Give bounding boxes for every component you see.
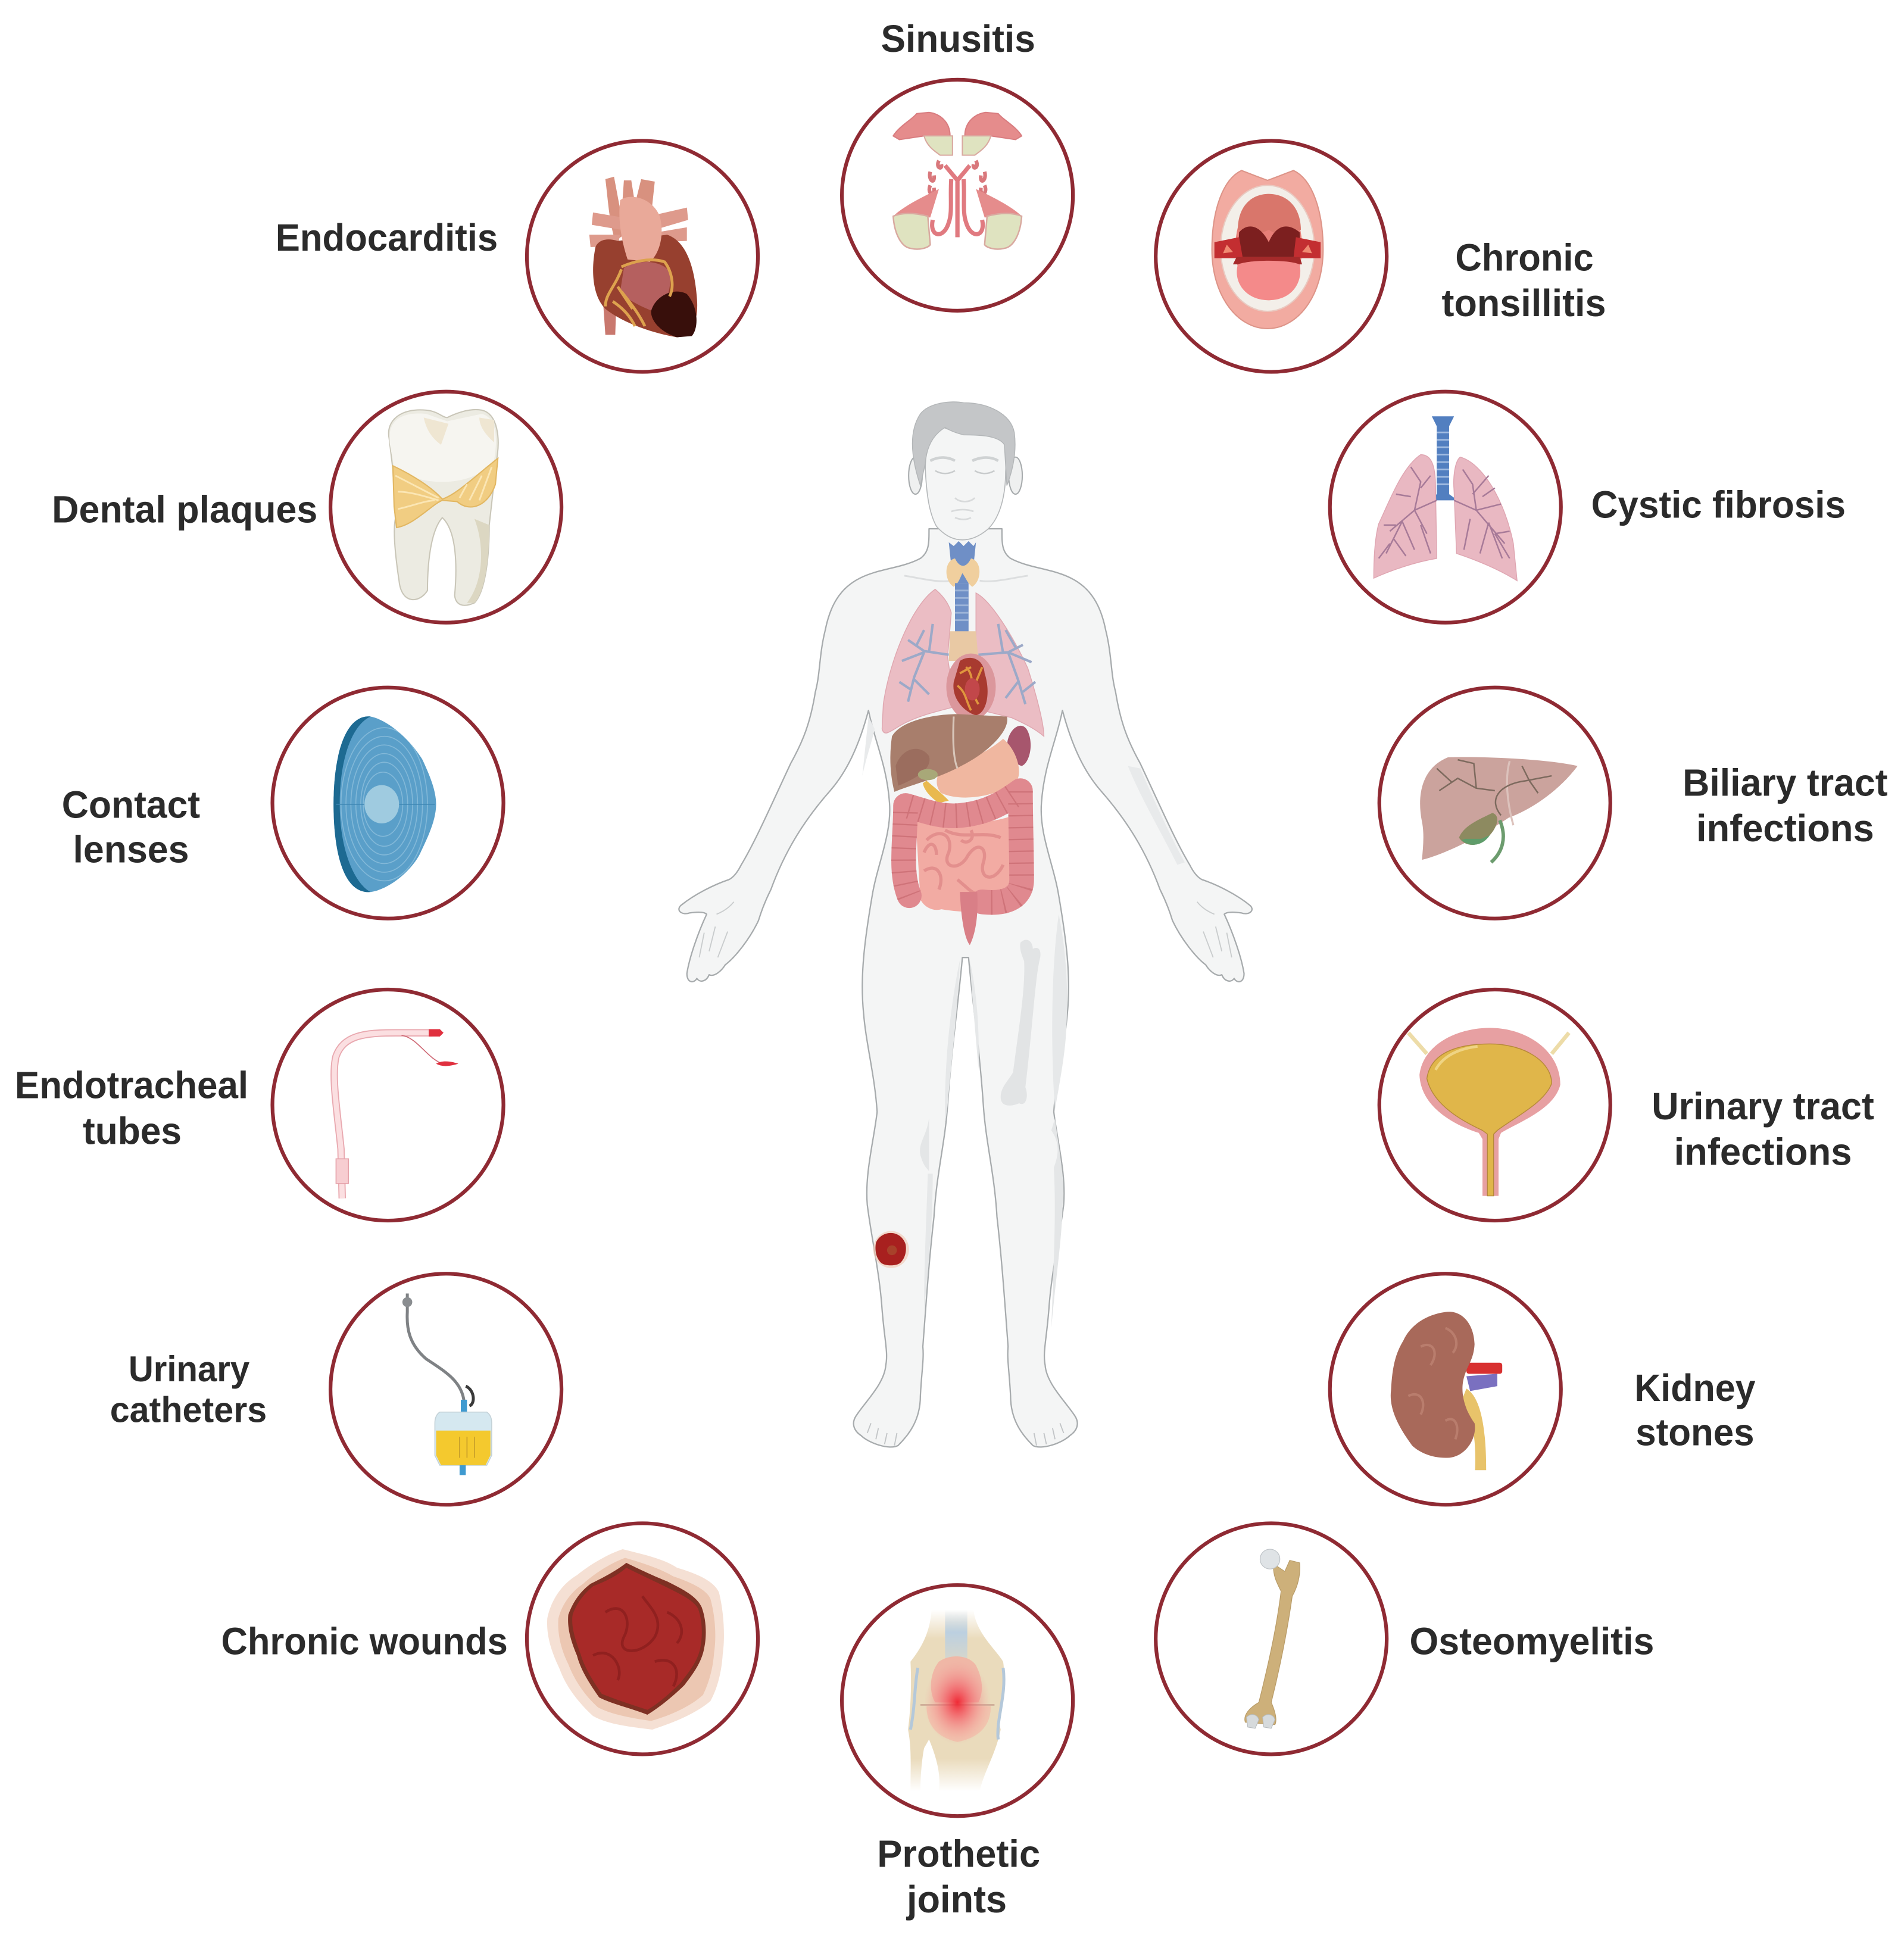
panel: osteomyelitis <box>1156 1523 1654 1754</box>
label: Prothetic joints <box>877 1832 1040 1921</box>
panel: chronic wounds <box>221 1523 758 1754</box>
icon: open mouth <box>1212 170 1323 329</box>
body outline: left half <box>679 529 967 1447</box>
label: Chronic tonsillitis: tonsillitis <box>1442 282 1606 324</box>
ring <box>842 1585 1073 1816</box>
label: Osteomyelitis: Osteomyelitis <box>1410 1619 1654 1662</box>
label: Dental plaques: Dental plaques <box>52 488 317 531</box>
sinus right half <box>957 113 1022 249</box>
body outline: right half <box>964 529 1252 1447</box>
label: Endotracheal tubes <box>15 1064 248 1152</box>
ring <box>1156 141 1387 372</box>
label: Urinary tract infections <box>1652 1085 1874 1174</box>
panel: urinary catheters <box>110 1274 561 1505</box>
ring <box>273 688 504 919</box>
label: Prothetic joints: Prothetic <box>877 1832 1040 1875</box>
label: Sinusitis: Sinusitis <box>881 17 1035 60</box>
label: Endotracheal tubes: Endotracheal <box>15 1064 248 1107</box>
panel: biliary tract infections <box>1379 688 1888 919</box>
organs: larynx, thyroid and trachea <box>947 541 979 632</box>
label: Urinary catheters <box>110 1349 267 1430</box>
icon: inflamed knee <box>908 1610 1004 1792</box>
panel: prosthetic joints <box>842 1585 1073 1921</box>
wound on the lower leg <box>873 1231 909 1268</box>
organs: heart and mediastinum <box>946 631 995 720</box>
label: Biliary tract infections <box>1683 761 1888 850</box>
label: Chronic wounds: Chronic wounds <box>221 1619 508 1662</box>
ring <box>1156 1523 1387 1754</box>
icon: endotracheal tube <box>334 1029 458 1199</box>
ring <box>527 1523 758 1754</box>
panel: sinusitis <box>842 17 1073 311</box>
icon: lungs with trachea <box>1374 416 1517 581</box>
label: Urinary tract infections: infections <box>1674 1131 1852 1174</box>
organs: intestines <box>904 791 1022 945</box>
panel: endocarditis <box>276 141 758 372</box>
ring <box>273 990 504 1221</box>
panel: contact lenses <box>62 688 504 919</box>
panel: endotracheal tubes <box>15 990 504 1221</box>
icon: sinuses <box>893 113 1022 249</box>
label: Contact lenses <box>62 784 200 870</box>
icon: wound <box>547 1549 724 1730</box>
label: Contact lenses: Contact <box>62 784 200 826</box>
label: Biliary tract infections: Biliary tract <box>1683 761 1888 804</box>
label: Biliary tract infections: infections <box>1696 807 1874 850</box>
icon: femur <box>1245 1549 1300 1728</box>
panel: chronic tonsillitis <box>1156 141 1606 372</box>
label: Urinary catheters: Urinary <box>129 1349 250 1389</box>
label: Endocarditis: Endocarditis <box>276 216 498 259</box>
panel: cystic fibrosis <box>1330 392 1846 623</box>
icon: catheter and drainage bag <box>402 1293 492 1475</box>
icon: kidney <box>1391 1312 1502 1470</box>
label: Chronic tonsillitis: Chronic <box>1455 236 1594 279</box>
label: Chronic tonsillitis <box>1442 236 1606 324</box>
ring <box>1330 1274 1561 1505</box>
label: Contact lenses: lenses <box>73 828 189 870</box>
panel: urinary tract infections <box>1379 990 1874 1221</box>
panel: dental plaques <box>52 392 561 623</box>
ring <box>330 1274 561 1505</box>
label: Cystic fibrosis: Cystic fibrosis <box>1591 483 1846 526</box>
ring <box>330 392 561 623</box>
organs: liver, gallbladder and pancreas <box>890 714 1007 803</box>
icon: heart <box>589 177 697 337</box>
organs: stomach and spleen <box>937 726 1031 798</box>
organs: lungs <box>882 589 1044 736</box>
label: Urinary tract infections: Urinary tract <box>1652 1085 1874 1128</box>
icon: liver and gallbladder <box>1420 757 1578 862</box>
ring <box>1379 688 1610 919</box>
femur silhouette in the leg <box>1001 940 1041 1106</box>
label: Kidney stones: Kidney <box>1634 1366 1756 1409</box>
label: Kidney stones: stones <box>1635 1411 1754 1454</box>
icon: contact lens <box>333 716 436 892</box>
human body figure <box>679 402 1252 1447</box>
panel: kidney stones <box>1330 1274 1756 1505</box>
ring <box>527 141 758 372</box>
icon: tooth with plaque <box>389 410 498 606</box>
label: Endotracheal tubes: tubes <box>83 1109 182 1152</box>
head and face <box>904 402 1028 581</box>
label: Prothetic joints: joints <box>906 1878 1007 1921</box>
icon: bladder <box>1408 1028 1569 1196</box>
ring <box>842 80 1073 311</box>
label: Kidney stones <box>1634 1366 1756 1454</box>
ring <box>1379 990 1610 1221</box>
label: Urinary catheters: catheters <box>110 1390 267 1430</box>
ring <box>1330 392 1561 623</box>
sinus left half <box>893 113 957 249</box>
